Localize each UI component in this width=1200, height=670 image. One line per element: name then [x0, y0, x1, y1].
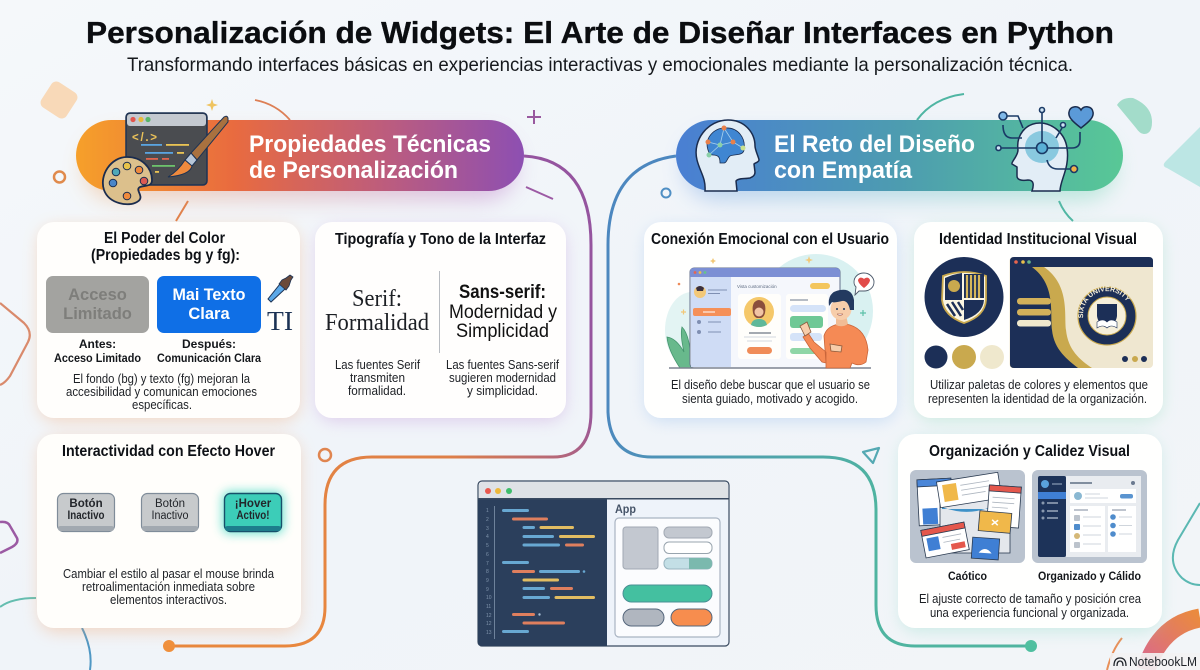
illustration: organized layout — [1032, 470, 1147, 563]
caption: después: Comunicación Clara — [157, 351, 261, 365]
caption: organizado y cálido: Organizado y Cálido — [1038, 569, 1141, 583]
text: hover description — [63, 567, 274, 607]
icon: crest — [924, 257, 1004, 337]
blue high contrast button: Mai Texto — [172, 286, 246, 304]
code panel: 8 — [486, 569, 489, 575]
icon: paintbrush — [168, 116, 228, 177]
text: hover description: elementos interactivos. — [110, 593, 227, 607]
sans-serif sample: Modernidad y — [449, 302, 557, 323]
code panel: 10 — [486, 595, 492, 601]
heading: propiedades técnicas: Propiedades Técnicas — [249, 131, 491, 158]
heading: tipografía: Tipografía y Tono de la Interfaz — [335, 231, 546, 248]
text: organización description: una experiencia funcional y organizada. — [930, 606, 1129, 620]
text: color description: accesibilidad y comunican emociones — [66, 385, 257, 399]
text: color description: El fondo (bg) y texto (fg) mejoran la — [73, 372, 250, 386]
button: inactive 1: Botón — [69, 498, 103, 510]
blue high contrast button — [157, 276, 261, 333]
text: identidad description: Utilizar paletas de colores y elementos que — [930, 378, 1148, 392]
code panel: 12 — [486, 621, 492, 627]
text: identidad description: representen la identidad de la organización. — [928, 392, 1147, 406]
code panel: 3 — [486, 526, 489, 532]
heading: identidad: Identidad Institucional Visual — [939, 231, 1137, 248]
divider — [439, 271, 440, 353]
text: color description: específicas. — [132, 398, 192, 412]
icon: head with circuit and heart — [996, 107, 1093, 191]
notebooklm badge — [1110, 653, 1200, 670]
caption: caótico: Caótico — [948, 569, 987, 583]
subtitle: Transformando interfaces básicas en experiencias interactivas y emocionales mediante la personalización técnica. — [127, 54, 1073, 76]
grey low contrast button — [46, 276, 149, 333]
connector line: left — [163, 156, 591, 652]
button: inactive 2: Inactivo — [152, 510, 188, 522]
heading: el poder del color — [91, 230, 240, 264]
heading: el poder del color: (Propiedades bg y fg): — [91, 247, 240, 264]
code panel: 9 — [486, 578, 489, 584]
text: conexión description: sienta guiado, motivado y acogido. — [682, 392, 858, 406]
grey low contrast button: Limitado — [63, 305, 132, 323]
text: color description — [66, 372, 257, 412]
code panel: 6 — [486, 552, 489, 558]
panel: organización y calidez — [898, 434, 1162, 632]
blue high contrast button: Clara — [188, 305, 230, 323]
code panel — [478, 500, 607, 646]
text: sans-serif description: y simplicidad. — [467, 384, 538, 398]
university window — [1010, 257, 1153, 368]
serif sample: Serif: — [352, 286, 402, 312]
icon: type TI: TI — [267, 306, 293, 336]
text: hover description: retroalimentación inmediata sobre — [82, 580, 255, 594]
button: hover active — [222, 491, 284, 534]
text: serif description: Las fuentes Serif — [335, 358, 420, 372]
illustration: user and interface: Vista customización — [737, 284, 777, 289]
panel: el poder del color — [37, 222, 300, 421]
seal: university: SIXTA UNIVERSITY — [1078, 286, 1130, 318]
icon: heart speech bubble — [854, 273, 874, 295]
serif sample — [325, 286, 429, 336]
app preview — [615, 502, 720, 637]
text: serif description: formalidad. — [348, 384, 406, 398]
heading: reto del diseño: con Empatía — [774, 157, 913, 184]
code panel: 13 — [486, 630, 492, 636]
caption: antes — [54, 337, 141, 365]
heading: reto del diseño: El Reto del Diseño — [774, 131, 975, 158]
code panel: 12 — [486, 613, 492, 619]
sans-serif sample: Sans-serif: — [459, 282, 546, 303]
text: hover description: Cambiar el estilo al pasar el mouse brinda — [63, 567, 274, 581]
heading: reto del diseño — [774, 131, 975, 184]
connector line: right — [608, 156, 1037, 652]
heading: propiedades técnicas — [249, 131, 491, 184]
text: sans-serif description: Las fuentes Sans-serif — [446, 358, 559, 372]
title: Personalización de Widgets: El Arte de Diseñar Interfaces en Python — [86, 15, 1114, 50]
panel: conexión emocional — [644, 222, 897, 421]
text: sans-serif description: sugieren modernidad — [449, 371, 556, 385]
code panel: 11 — [486, 604, 491, 610]
panel: identidad institucional — [910, 221, 1168, 427]
code panel: 4 — [486, 534, 489, 540]
code panel: 9 — [486, 587, 489, 593]
palette swatches — [924, 345, 1004, 369]
text: organización description: El ajuste correcto de tamaño y posición crea — [919, 592, 1141, 606]
caption: antes: Acceso Limitado — [54, 351, 141, 365]
caption: después — [157, 337, 261, 365]
panel: interactividad hover — [37, 434, 301, 632]
text: serif description: transmiten — [350, 371, 405, 385]
seal: university — [1077, 286, 1137, 346]
button: hover active: Activo! — [236, 510, 270, 522]
code panel: 5 — [486, 543, 489, 549]
icon: dropper — [268, 275, 293, 302]
icon: code window: </.> — [132, 132, 157, 144]
text: serif description — [335, 358, 420, 398]
icon: code window — [126, 113, 207, 185]
panel: propiedades técnicas header — [76, 113, 524, 204]
sans-serif sample: Simplicidad — [456, 321, 549, 342]
text: conexión description: El diseño debe buscar que el usuario se — [671, 378, 870, 392]
serif sample: Formalidad — [325, 310, 429, 336]
icon: palette — [103, 157, 152, 204]
panel: tipografía y tono — [315, 222, 566, 421]
heading: organización: Organización y Calidez Visual — [929, 443, 1130, 460]
button: inactive 2: Botón — [155, 498, 185, 510]
app preview: App — [615, 502, 636, 516]
button: inactive 2 — [142, 494, 198, 532]
illustration: chaotic layout — [910, 470, 1025, 563]
button: hover active: ¡Hover — [235, 498, 272, 510]
button: inactive 1: Inactivo — [68, 510, 104, 522]
panel: code editor and app window — [478, 481, 729, 646]
code panel: 2 — [486, 517, 489, 523]
text: sans-serif description — [446, 358, 559, 398]
heading: conexión emocional: Conexión Emocional con el Usuario — [651, 231, 889, 248]
text: organización description — [919, 592, 1141, 620]
heading: interactividad: Interactividad con Efecto Hover — [62, 443, 275, 460]
caption: después: Después: — [182, 337, 236, 351]
panel: reto del diseño header — [676, 107, 1123, 200]
illustration: user and interface — [665, 254, 873, 368]
heading: propiedades técnicas: de Personalización — [249, 157, 458, 184]
code panel: 1 — [486, 508, 489, 514]
caption: antes: Antes: — [79, 337, 116, 351]
text: conexión description — [671, 378, 870, 406]
icon: head with brain — [696, 120, 759, 191]
sans-serif sample — [449, 282, 557, 342]
code panel: 7 — [486, 561, 489, 567]
heading: el poder del color: El Poder del Color — [104, 230, 225, 247]
button: inactive 1 — [58, 494, 114, 532]
grey low contrast button: Acceso — [68, 286, 127, 304]
text: identidad description — [928, 378, 1148, 406]
